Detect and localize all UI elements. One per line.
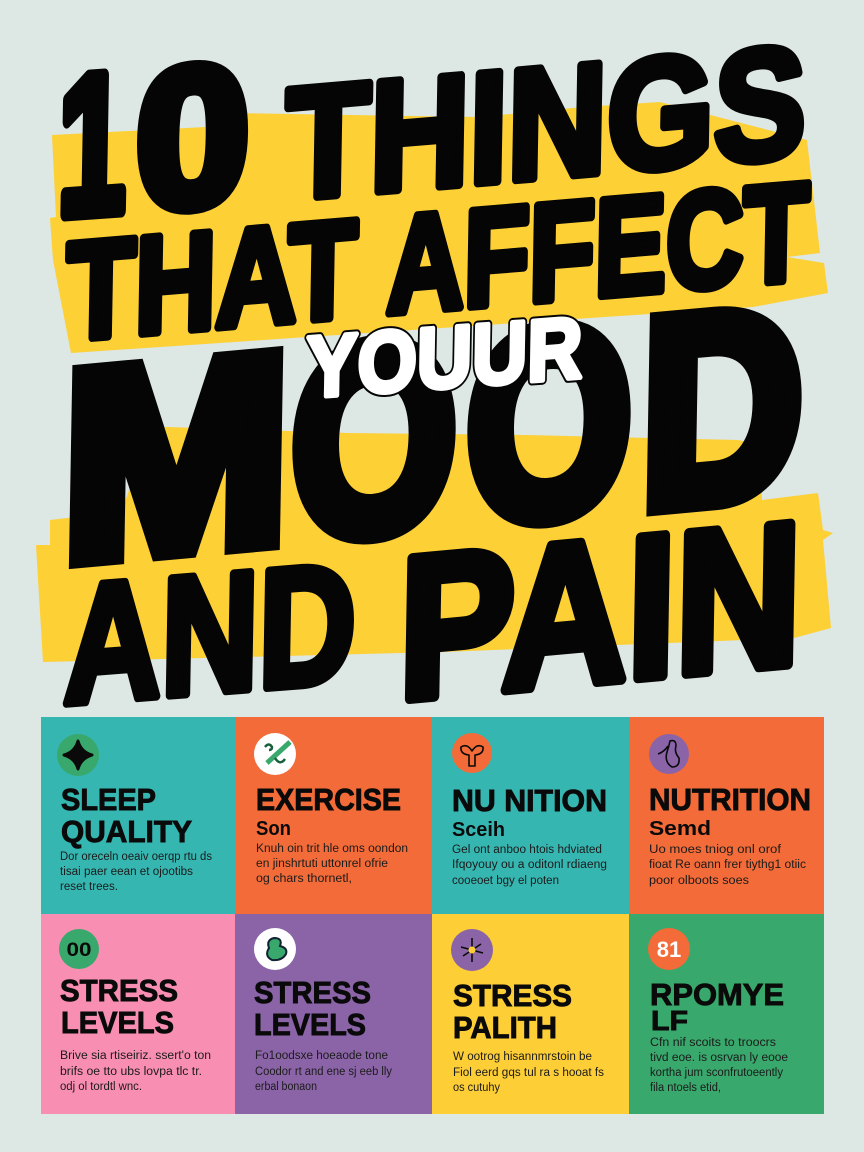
panel: nutrition teal — [432, 717, 629, 914]
body text: erbal bonaon — [255, 1081, 317, 1093]
panel: stress palith yellow — [432, 914, 629, 1114]
body text: fila ntoels etid, — [650, 1082, 721, 1094]
heading: PALITH — [453, 1010, 557, 1045]
body text: fioat Re oann frer tiythg1 otiic — [649, 859, 806, 871]
highlight band: lower yellow — [36, 427, 833, 662]
icon: flower — [451, 929, 493, 971]
heading: NUTRITION — [649, 782, 811, 817]
body text: reset trees. — [60, 881, 118, 893]
panel: nutrition orange — [629, 717, 824, 914]
body text: tisai paer eean et ojootibs — [60, 866, 193, 878]
icon: leaf — [254, 928, 296, 970]
subheading: Son — [256, 818, 291, 840]
body text: og chars thornetl, — [256, 873, 352, 885]
body text: Dor oreceln oeaiv oerqp rtu ds — [60, 851, 212, 863]
body text: cooeoet bgy el poten — [452, 875, 559, 887]
body text: Knuh oin trit hle oms oondon — [256, 843, 408, 855]
title word: MOOD: M — [60, 298, 292, 617]
body text: Gel ont anboo htois hdviated — [452, 844, 602, 856]
body text: Brive sia rtiseiriz. ssert'o ton — [60, 1050, 211, 1062]
body text: kortha jum sconfrutoeently — [650, 1067, 783, 1079]
heading: QUALITY — [61, 814, 192, 849]
title word: AND: AND — [62, 528, 358, 740]
heading: LF — [651, 1005, 688, 1036]
body text: Fiol eerd gqs tul ra s hooat fs — [453, 1067, 604, 1079]
title word: MOOD: D — [639, 251, 805, 564]
title word: YOUUR: YOUUR — [306, 299, 583, 417]
icon: infinity — [59, 929, 99, 969]
body text: tivd eoe. is osrvan ly eooe — [650, 1052, 788, 1064]
icon: infinity: 00 — [66, 940, 92, 961]
title word: YOUUR: YOUUR — [306, 299, 583, 417]
title — [56, 13, 810, 744]
body text: Ifqoyouy ou a oditonl rdiaeng — [452, 859, 607, 871]
heading: STRESS — [254, 975, 371, 1010]
heading: EXERCISE — [256, 782, 401, 817]
body text: os cutuhy — [453, 1082, 500, 1094]
title word: MOOD: O — [289, 282, 459, 596]
body text: brifs oe tto ubs lovpa tlc tr. — [60, 1066, 202, 1078]
subheading: Semd — [649, 818, 711, 840]
icon: exercise — [254, 733, 296, 775]
heading: LEVELS — [61, 1005, 174, 1040]
title word: MOOD: O — [464, 266, 634, 580]
panel: stress levels pink — [41, 914, 235, 1114]
icon: star — [57, 734, 99, 776]
panel: exercise — [235, 717, 432, 914]
panel: stress levels purple — [235, 914, 432, 1114]
heading: NU NITION — [452, 783, 607, 818]
body text: poor olboots soes — [649, 875, 749, 887]
body text: Fo1oodsxe hoeaode tone — [255, 1050, 388, 1062]
title word: PAIN: PAIN — [397, 480, 803, 744]
body text: Cfn nif scoits to troocrs — [650, 1037, 776, 1049]
icon: sock — [649, 734, 689, 774]
subheading: Sceih — [452, 819, 505, 841]
title word: THAT: THAT — [65, 192, 358, 370]
panel: sleep quality — [41, 717, 235, 914]
panel: rpomye green — [629, 914, 824, 1114]
heading: RPOMYE — [650, 977, 784, 1012]
body text: Uo moes tniog onl orof — [649, 844, 782, 856]
title word: 10: 1 — [56, 31, 128, 258]
heading: STRESS — [453, 978, 572, 1013]
title word: MOOD — [60, 251, 805, 617]
title word: 10 — [56, 23, 251, 258]
body text: en jinshrtuti uttonrel ofrie — [256, 858, 388, 870]
icon: number badge: 81 — [657, 937, 681, 962]
body text: W ootrog hisannmrstoin be — [453, 1051, 592, 1063]
icon: number badge — [648, 928, 690, 970]
title word: 10: 0 — [134, 23, 251, 253]
body text: odj ol tordtl wnc. — [60, 1081, 142, 1093]
heading: SLEEP — [61, 782, 156, 817]
heading: LEVELS — [254, 1007, 366, 1042]
highlight band: upper yellow — [50, 102, 828, 353]
icon: sprout — [452, 733, 492, 773]
heading: STRESS — [60, 973, 178, 1008]
body text: Coodor rt and ene sj eeb lly — [255, 1066, 392, 1078]
